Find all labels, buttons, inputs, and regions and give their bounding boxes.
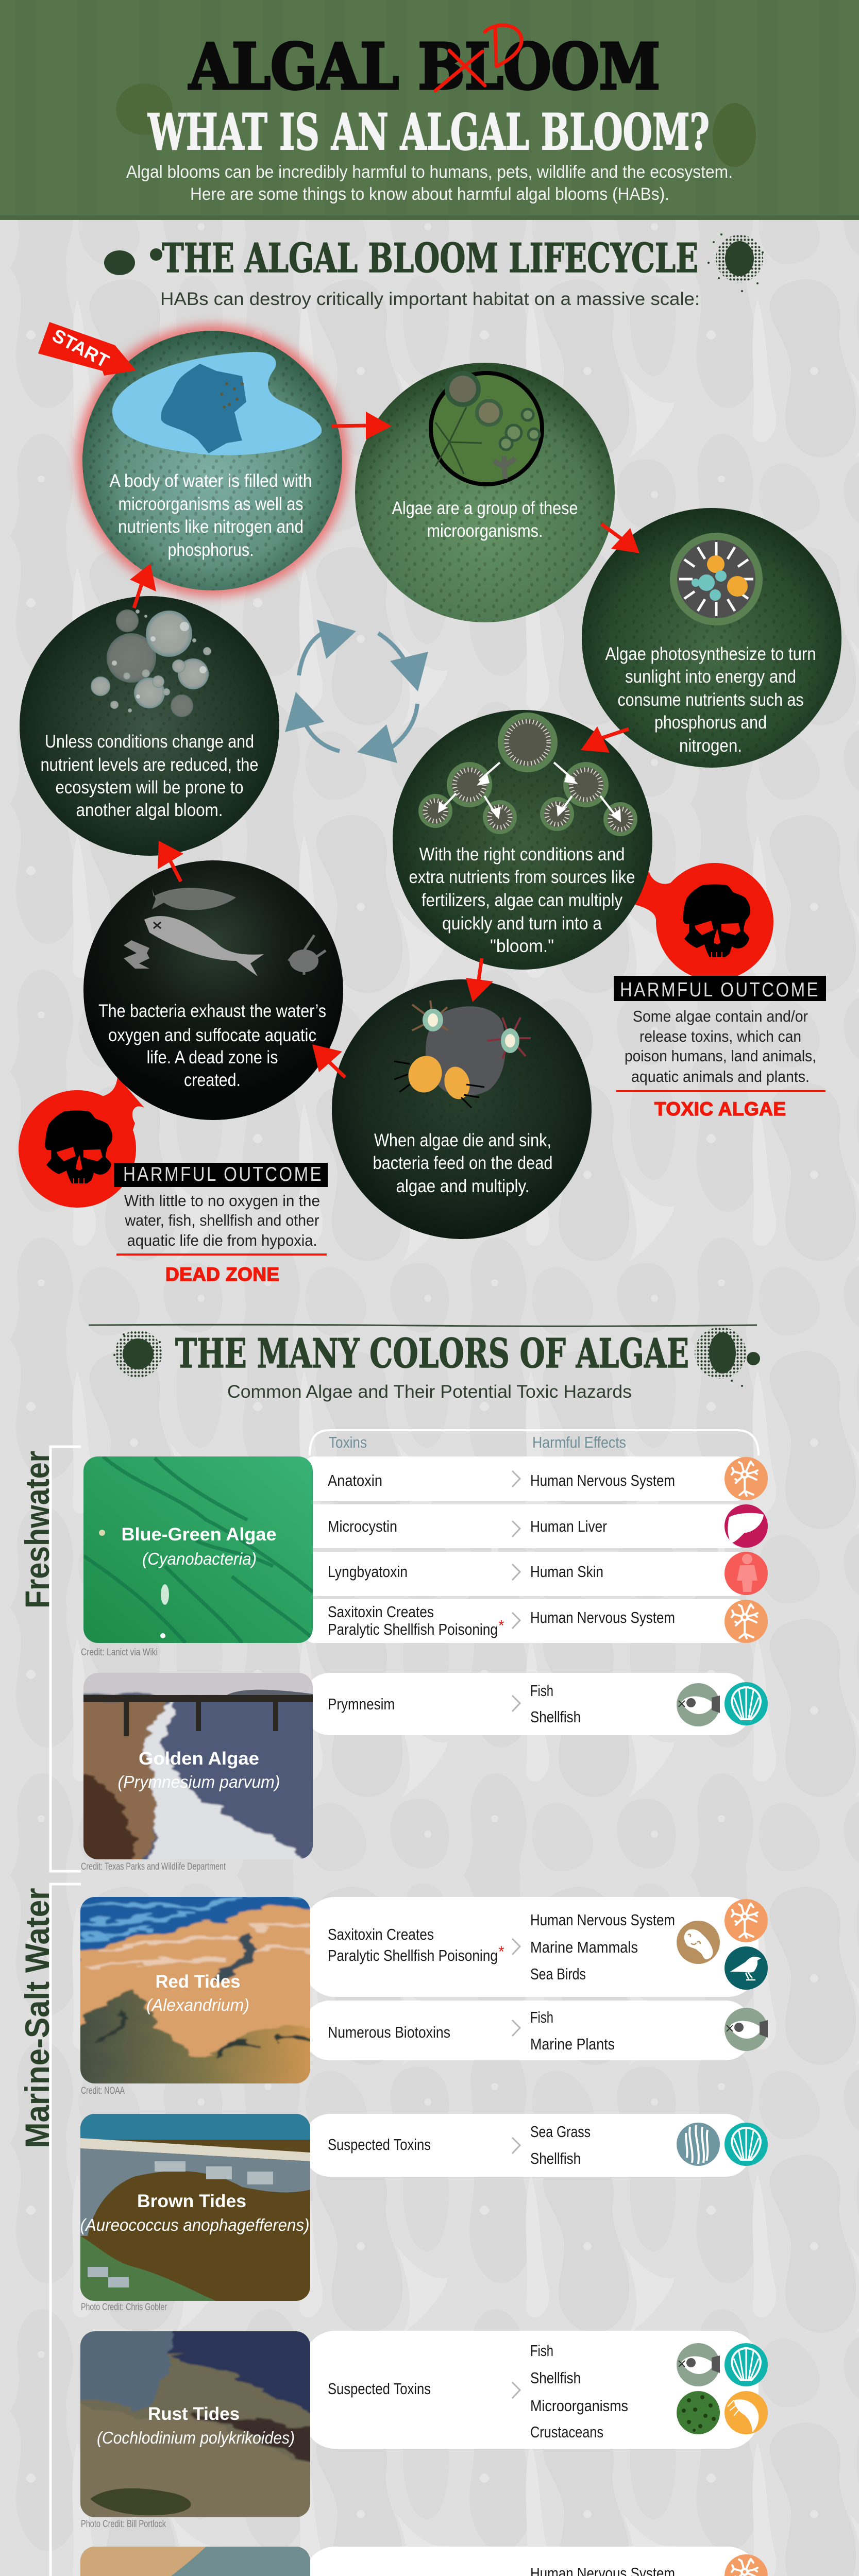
panel: brown tides xyxy=(80,2114,768,2313)
step 2: algae: microorganisms. xyxy=(427,521,543,541)
toxin row: Crustaceans xyxy=(530,2423,603,2441)
panel: brown tides: (Aureococcus anophagefferens) xyxy=(80,2215,309,2234)
step 4: bloom: "bloom." xyxy=(490,936,554,956)
toxin rows: Anatoxin xyxy=(328,1471,382,1489)
icon: dead fish xyxy=(124,888,326,976)
toxin rows: Lyngbyatoxin xyxy=(328,1563,408,1581)
step 3: photosynthesis: phosphorus and xyxy=(654,713,767,733)
title: algal bloom: ALGAL BLOOM xyxy=(189,29,660,104)
intro text xyxy=(126,162,733,204)
photo: brown tides xyxy=(80,2114,310,2301)
callout: dead zone: With little to no oxygen in the xyxy=(124,1192,320,1210)
arrow: 3 to 4 xyxy=(581,726,629,753)
callout: dead zone: DEAD ZONE xyxy=(165,1264,279,1285)
toxin row: Shellfish xyxy=(530,2369,581,2387)
callout: toxic algae: TOXIC ALGAE xyxy=(654,1098,786,1120)
step 4: bloom: fertilizers, algae can multiply xyxy=(422,890,622,910)
photo: toxic diatom bloom xyxy=(80,2547,310,2576)
table header xyxy=(310,1430,759,1455)
panel: brown tides: Photo Credit: Chris Gobler xyxy=(81,2302,167,2313)
icon: nervous system xyxy=(725,1457,768,1500)
arrow: 6 to 7 xyxy=(158,841,183,882)
toxin rows: Marine Plants xyxy=(530,2035,615,2053)
callout: dead zone: water, fish, shellfish and other xyxy=(125,1211,319,1229)
section subtitle: Common Algae and Their Potential Toxic Hazards xyxy=(227,1382,632,1402)
panel: brown tides: Brown Tides xyxy=(137,2191,246,2211)
toxin rows: Fish xyxy=(530,2008,553,2026)
step 2: algae: Algae are a group of these xyxy=(392,498,578,518)
callout: toxic algae xyxy=(614,976,826,1120)
panel: blue-green algae xyxy=(81,1456,768,1658)
callout: toxic algae: Some algae contain and/or xyxy=(633,1007,808,1025)
panel: blue-green algae: Credit: Lanict via Wiki xyxy=(81,1647,158,1658)
step 1: body of water xyxy=(76,325,348,597)
panel: golden algae: (Prymnesium parvum) xyxy=(117,1772,280,1791)
photo: golden algae xyxy=(83,1673,313,1859)
step 6: dead zone created: oxygen and suffocate aquatic xyxy=(108,1025,316,1045)
lifecycle subtitle: HABs can destroy critically important habitat on a massive scale: xyxy=(160,289,700,309)
callout: toxic algae: aquatic animals and plants. xyxy=(631,1067,810,1086)
icon: multiplying algae xyxy=(418,713,637,836)
toxin rows: Numerous Biotoxins xyxy=(328,2023,450,2041)
toxin row: Shellfish xyxy=(530,2149,581,2167)
toxin rows: Saxitoxin Creates xyxy=(328,1603,434,1621)
heading: lifecycle xyxy=(104,233,764,292)
step 3: photosynthesis xyxy=(582,508,841,768)
step 3: photosynthesis: nitrogen. xyxy=(679,736,742,756)
step 4: bloom: extra nutrients from sources like xyxy=(409,867,635,887)
panel: red tides: Credit: NOAA xyxy=(81,2086,125,2096)
step 2: algae xyxy=(355,363,615,622)
panel: golden algae xyxy=(81,1673,768,1872)
icon: bubbles xyxy=(91,609,211,717)
toxin rows: Microcystin xyxy=(328,1517,397,1535)
callout: toxic algae: poison humans, land animals, xyxy=(625,1047,816,1065)
step 1: body of water: nutrients like nitrogen and xyxy=(118,517,304,537)
toxin rows: Human Nervous System xyxy=(530,1608,675,1626)
label: freshwater xyxy=(18,1447,81,1871)
panel: red tides xyxy=(80,1897,768,2094)
step 7: prone to bloom: another algal bloom. xyxy=(76,800,223,820)
step 3: photosynthesis: Algae photosynthesize to turn xyxy=(605,644,816,664)
label: freshwater: Freshwater xyxy=(18,1451,56,1608)
step 7: prone to bloom: Unless conditions change and xyxy=(45,732,254,752)
dead zone skull blob xyxy=(19,1077,144,1208)
toxin rows: Saxitoxin Creates xyxy=(328,1925,434,1943)
step 1: body of water: microorganisms as well as xyxy=(119,494,303,514)
toxin rows: Human Nervous System xyxy=(530,1911,675,1929)
panel: golden algae: Golden Algae xyxy=(139,1749,259,1769)
photo: blue-green algae xyxy=(83,1456,313,1643)
toxin row: Fish xyxy=(530,1682,553,1700)
table header: Harmful Effects xyxy=(532,1433,626,1451)
toxin row xyxy=(304,2114,768,2177)
icon: lake xyxy=(112,352,322,455)
toxin rows: Paralytic Shellfish Poisoning xyxy=(328,1946,498,1964)
step 5: bacteria feed: When algae die and sink, xyxy=(374,1130,551,1150)
start flag xyxy=(38,322,136,376)
callout: dead zone: HARMFUL OUTCOME xyxy=(123,1163,323,1185)
step 3: photosynthesis: sunlight into energy and xyxy=(625,667,796,687)
toxin row: Sea Grass xyxy=(530,2123,591,2141)
intro text: Here are some things to know about harmful algal blooms (HABs). xyxy=(190,184,669,204)
center cycle arrows xyxy=(285,620,428,763)
header band xyxy=(0,0,859,220)
icon: skin xyxy=(725,1552,768,1595)
step 4: bloom: quickly and turn into a xyxy=(442,913,602,934)
toxin row: Microorganisms xyxy=(530,2397,628,2415)
step 6: dead zone created xyxy=(83,860,343,1120)
intro text: Algal blooms can be incredibly harmful to humans, pets, wildlife and the ecosystem. xyxy=(126,162,733,182)
callout: dead zone: aquatic life die from hypoxia. xyxy=(127,1231,317,1249)
panel: toxic diatom bloom xyxy=(80,2547,768,2576)
icon: microscope view xyxy=(431,371,542,484)
toxin rows: Sea Birds xyxy=(530,1965,586,1983)
step 6: dead zone created: created. xyxy=(184,1070,241,1090)
step 4: bloom: With the right conditions and xyxy=(419,844,625,865)
step 5: bacteria feed: algae and multiply. xyxy=(396,1176,530,1196)
step 6: dead zone created: The bacteria exhaust the water’s xyxy=(98,1001,326,1021)
toxin rows: Human Nervous System xyxy=(530,1471,675,1489)
start flag: START xyxy=(49,325,112,371)
panel: rust tides: Rust Tides xyxy=(148,2404,240,2424)
callout: dead zone xyxy=(114,1163,328,1285)
step 6: dead zone created: life. A dead zone is xyxy=(146,1047,278,1067)
step 4: bloom xyxy=(393,710,652,970)
panel: golden algae: Credit: Texas Parks and Wildlife Department xyxy=(81,1861,226,1872)
toxin rows xyxy=(304,1456,747,1643)
toxin rows xyxy=(304,1897,768,2060)
icon: algae cell xyxy=(670,533,763,625)
toxin row xyxy=(304,2331,768,2449)
panel: blue-green algae: Blue-Green Algae xyxy=(122,1524,276,1545)
toxin row xyxy=(304,1673,768,1735)
toxin row: Suspected Toxins xyxy=(328,2136,431,2154)
arrow: 1 to 2 xyxy=(331,412,392,439)
toxin rows: * xyxy=(498,1943,504,1960)
step 7: prone to bloom xyxy=(20,596,279,856)
table header: Toxins xyxy=(329,1433,367,1451)
toxin row: Fish xyxy=(530,2342,553,2360)
toxin rows: Paralytic Shellfish Poisoning xyxy=(328,1620,498,1638)
callout: toxic algae: HARMFUL OUTCOME xyxy=(620,979,820,1001)
toxin row: Suspected Toxins xyxy=(328,2380,431,2398)
panel: rust tides: Photo Credit: Bill Portlock xyxy=(81,2519,166,2530)
icon: nervous system xyxy=(725,1600,768,1643)
step 1: body of water: A body of water is filled with xyxy=(109,471,312,491)
toxin rows: Human Liver xyxy=(530,1517,607,1535)
label: marine-salt water xyxy=(18,1884,81,2576)
step 3: photosynthesis: consume nutrients such as xyxy=(617,690,804,710)
toxin rows: Marine Mammals xyxy=(530,1938,638,1956)
panel: rust tides: (Cochlodinium polykrikoides) xyxy=(97,2428,295,2447)
toxic algae skull blob xyxy=(634,863,773,980)
step 7: prone to bloom: nutrient levels are reduced, the xyxy=(40,755,259,775)
panel: rust tides xyxy=(80,2331,768,2527)
arrow: 5 to 6 xyxy=(312,1044,345,1077)
step 7: prone to bloom: ecosystem will be prone to xyxy=(56,777,243,798)
label: marine-salt water: Marine-Salt Water xyxy=(18,1888,56,2148)
arrow: 2 to 3 xyxy=(601,524,639,553)
arrow: 4 to 5 xyxy=(466,958,493,1002)
step 5: bacteria feed: bacteria feed on the dead xyxy=(373,1153,552,1173)
photo: rust tides xyxy=(80,2331,310,2517)
step 1: body of water: phosphorus. xyxy=(168,540,254,560)
toxin rows: * xyxy=(498,1617,504,1634)
callout: toxic algae: release toxins, which can xyxy=(639,1027,801,1045)
toxin row: Shellfish xyxy=(530,1708,581,1726)
arrow: 7 to 1 xyxy=(130,564,156,608)
panel: red tides: (Alexandrium) xyxy=(146,1995,249,2014)
photo: red tides xyxy=(80,1897,310,2083)
heading: many colors xyxy=(113,1327,760,1387)
step 5: bacteria feed xyxy=(332,979,592,1239)
panel: blue-green algae: (Cyanobacteria) xyxy=(142,1549,257,1568)
toxin rows: Human Skin xyxy=(530,1563,603,1581)
toxin row: Prymnesim xyxy=(328,1695,395,1713)
icon: dead algae and bacteria xyxy=(394,1001,531,1108)
toxin row xyxy=(304,2547,768,2576)
panel: red tides: Red Tides xyxy=(156,1972,240,1992)
icon: liver xyxy=(725,1504,768,1548)
